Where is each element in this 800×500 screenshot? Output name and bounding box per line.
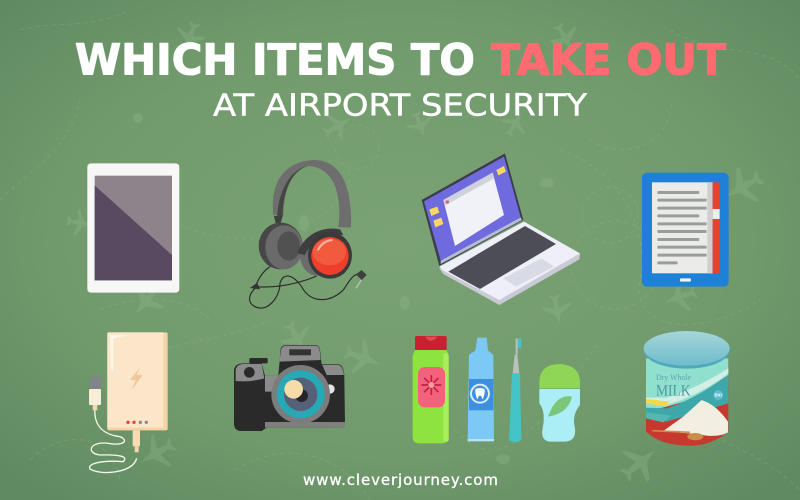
cable — [250, 267, 360, 308]
trackpad — [503, 258, 554, 287]
left ear cup — [259, 223, 303, 269]
laptop base — [439, 222, 580, 305]
battery body — [107, 332, 168, 430]
website footer: www.cleverjourney.com — [303, 471, 498, 489]
icon: milk can: BIO — [714, 393, 723, 398]
title — [75, 36, 727, 86]
icon: laptop — [422, 153, 580, 305]
deodorant — [539, 364, 580, 442]
keyboard — [448, 226, 556, 289]
icon: power bank — [89, 332, 168, 473]
headband — [273, 160, 351, 227]
electric toothbrush — [509, 338, 521, 442]
icon: tablet — [87, 163, 179, 293]
milk powder — [663, 400, 728, 436]
icon: toiletries — [413, 336, 580, 443]
label text: Dry Whole — [656, 373, 691, 382]
lens — [271, 365, 330, 424]
can body — [646, 358, 728, 446]
icon: milk can — [644, 331, 730, 446]
shampoo bottle — [413, 336, 449, 443]
icon: e-reader — [642, 173, 729, 287]
app window — [443, 173, 504, 246]
cable — [90, 408, 137, 473]
lid — [644, 331, 730, 369]
indicator lights — [126, 421, 130, 424]
badge — [713, 390, 723, 400]
bolt — [130, 367, 143, 390]
subtitle: AT AIRPORT SECURITY — [213, 88, 588, 124]
icon: camera — [234, 345, 345, 431]
icon: headphones — [250, 160, 367, 308]
title: WHICH ITEMS TO — [75, 36, 475, 86]
folders — [429, 166, 506, 227]
viewfinder hump — [279, 346, 321, 362]
laptop screen — [422, 153, 523, 266]
text lines — [657, 191, 707, 264]
top plates — [236, 364, 264, 381]
flash button — [325, 384, 335, 394]
usb plug — [90, 377, 101, 389]
icon: milk can: MILK — [656, 383, 691, 400]
toothpaste — [468, 338, 494, 441]
spoon — [652, 431, 690, 432]
title: TAKE OUT — [491, 36, 727, 86]
right ear cup — [300, 234, 335, 276]
camera body — [234, 345, 345, 431]
connector — [133, 430, 140, 446]
